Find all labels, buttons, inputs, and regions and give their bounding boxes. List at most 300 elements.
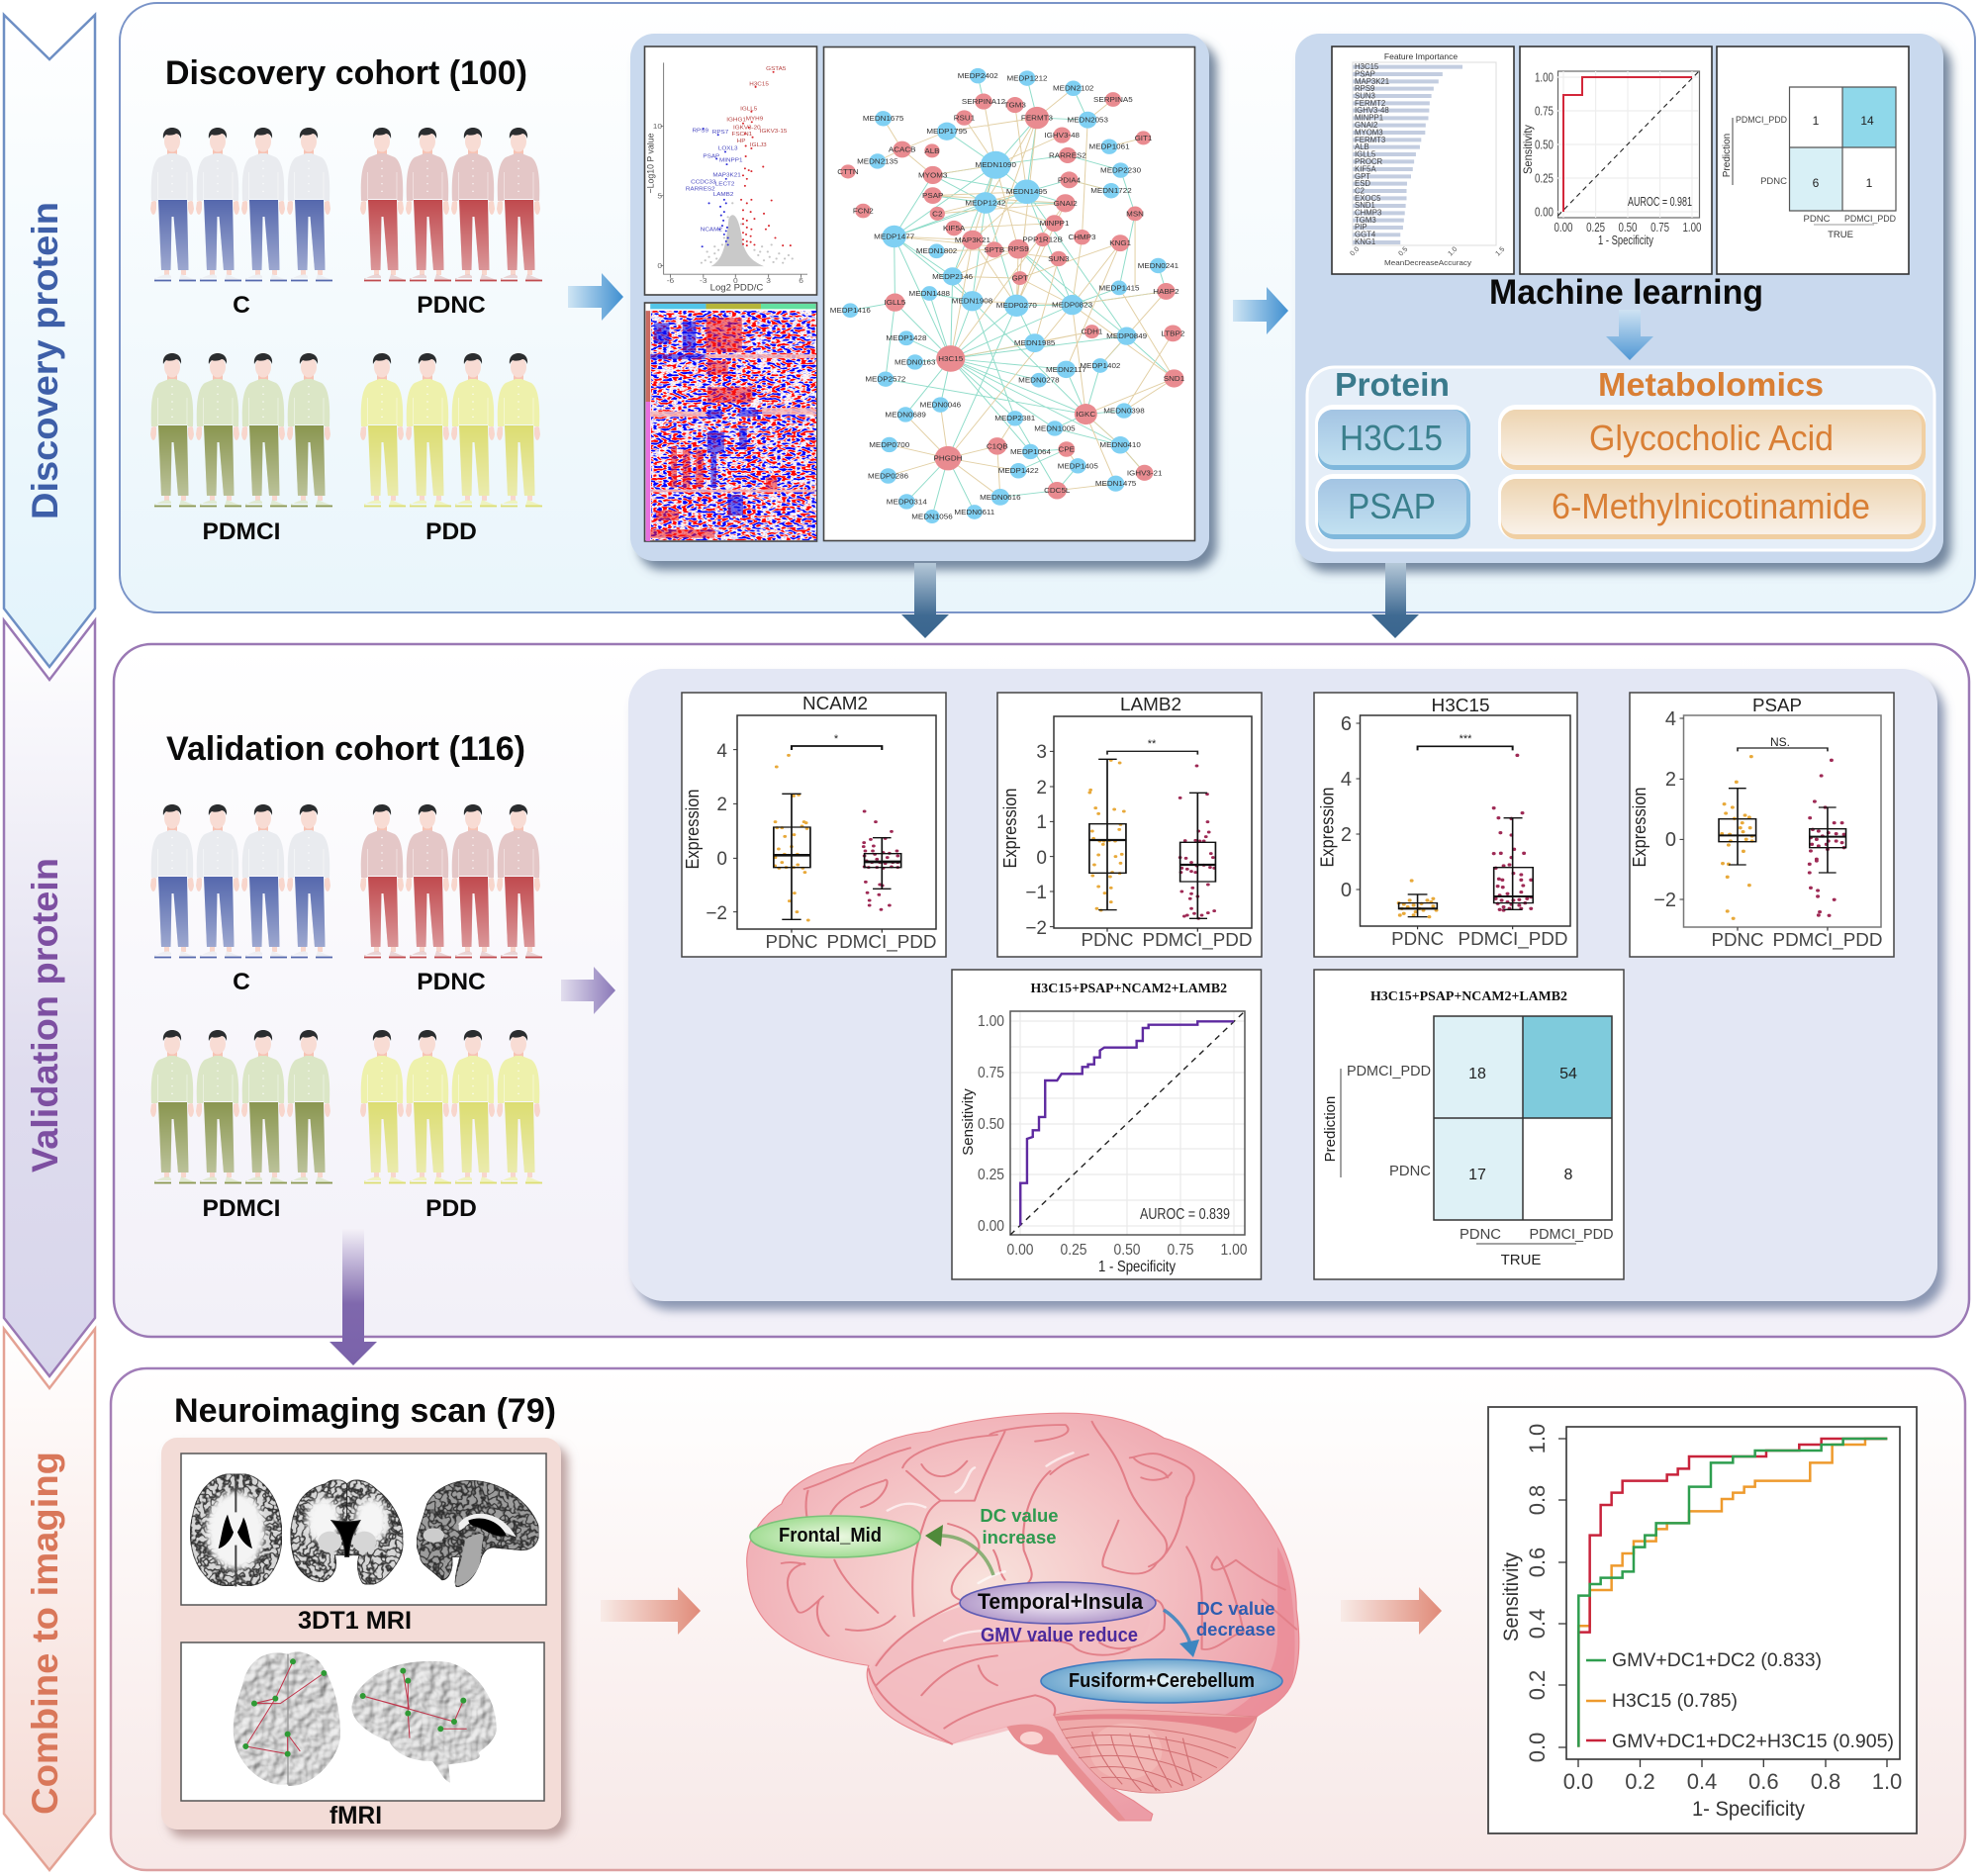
protein network: ALB <box>924 146 940 155</box>
chart: ROC discovery: Sensitivity <box>1521 125 1535 174</box>
chart: combined ROC: 0.2 <box>1525 1670 1550 1700</box>
chart: confusion matrix discovery: 14 <box>1860 114 1874 128</box>
heading: protein: Protein <box>1335 366 1450 403</box>
boxplot: LAMB2: LAMB2 <box>1120 695 1181 714</box>
heading: metabolomics: Metabolomics <box>1598 366 1824 403</box>
chip: glycocholic acid <box>1498 405 1926 470</box>
sidebar label: discovery protein: Discovery protein <box>25 202 65 519</box>
protein network: PSAP <box>922 191 943 200</box>
protein network: MEDN0689 <box>885 411 926 419</box>
chart: ROC validation: 1.00 <box>1221 1242 1248 1259</box>
protein network: MEDP2381 <box>994 415 1035 422</box>
panel: imaging <box>111 1368 1965 1870</box>
protein network: MEDN1475 <box>1095 479 1136 488</box>
chart: feature importance: RPS9 <box>1355 84 1374 93</box>
chart: combined ROC <box>1488 1407 1917 1833</box>
protein network: C2 <box>932 210 942 218</box>
arrow: DC increase <box>925 1525 993 1575</box>
protein network: KNG1 <box>1109 238 1131 247</box>
heading: validation cohort: Validation cohort (116) <box>166 730 525 768</box>
chip: H3C15 <box>1315 405 1470 470</box>
protein network: MEDP0823 <box>1052 301 1092 309</box>
volcano plot: Log2 PDD/C <box>710 283 764 293</box>
chart: ROC discovery: 1.00 <box>1682 221 1702 234</box>
sidebar: discovery protein chevron <box>4 15 95 667</box>
arrow: ML to biomarkers <box>1606 310 1653 360</box>
protein network: LTBP2 <box>1161 329 1184 337</box>
region: frontal mid: Frontal_Mid <box>779 1525 882 1547</box>
protein network: MEDN1005 <box>1034 424 1076 432</box>
boxplot: H3C15: H3C15 <box>1431 696 1490 715</box>
protein network: MYOM3 <box>918 171 947 179</box>
protein network: MEDN0398 <box>1103 407 1145 415</box>
chart: confusion matrix validation: PDMCI_PDD <box>1347 1063 1431 1079</box>
protein network: MEDP2230 <box>1100 166 1141 174</box>
chart: feature importance: PIP <box>1355 223 1367 232</box>
annotation: DC value increase <box>980 1505 1059 1548</box>
protein network: CDC5L <box>1044 486 1071 495</box>
volcano plot: GSTA5 <box>766 66 787 72</box>
protein network: CPE <box>1059 445 1075 453</box>
protein network: MEDN0163 <box>895 358 935 366</box>
chart: combined ROC: 1.0 <box>1525 1424 1550 1454</box>
chart: combined ROC: 0.0 <box>1525 1733 1550 1762</box>
volcano plot: MAP3K21 <box>712 173 741 178</box>
brain illustration <box>747 1413 1299 1821</box>
chart: confusion matrix discovery: 6 <box>1813 176 1820 190</box>
boxplot: H3C15: PDNC <box>1391 929 1444 949</box>
chart: ROC discovery: 0.75 <box>1535 105 1554 119</box>
protein network: MEDN1985 <box>1014 338 1055 347</box>
protein network: MEDN0611 <box>954 508 994 516</box>
chart: feature importance: 0.0 <box>1349 246 1361 257</box>
chart: ROC discovery: 0.75 <box>1650 221 1669 234</box>
protein network: MEDP1212 <box>1007 74 1048 82</box>
chart: feature importance: MINPP1 <box>1355 113 1383 123</box>
boxplot: PSAP: NS. <box>1770 735 1790 749</box>
protein network: PPP1R12B <box>1022 235 1063 244</box>
panel: omics <box>630 34 1209 561</box>
chart: feature importance: FERMT2 <box>1355 99 1385 108</box>
protein network: MEDP1405 <box>1058 462 1098 470</box>
chart: ROC discovery: 1.00 <box>1535 71 1554 85</box>
boxplot: PSAP: −2 <box>1653 890 1676 911</box>
chart: ROC validation: 0.25 <box>1061 1242 1087 1259</box>
sidebar: combine to imaging chevron <box>4 1329 95 1870</box>
chart: confusion matrix validation: 18 <box>1468 1066 1486 1082</box>
chart: confusion matrix validation: 54 <box>1559 1066 1577 1082</box>
arrow: scans to brain <box>601 1587 701 1635</box>
protein network: MEDP1416 <box>830 306 871 315</box>
protein network: FERMT3 <box>1021 114 1053 122</box>
boxplot: PSAP: PDMCI_PDD <box>1773 930 1882 951</box>
protein network: MEDP1402 <box>1080 361 1120 370</box>
fMRI images <box>181 1642 544 1801</box>
chart: feature importance: MYOM3 <box>1355 129 1383 137</box>
protein network: MEDP1428 <box>886 334 926 342</box>
volcano plot: RPS7 <box>712 130 729 136</box>
chart: confusion matrix discovery <box>1717 47 1909 274</box>
volcano plot: LECT2 <box>715 182 735 187</box>
sidebar: validation protein chevron <box>4 620 95 1376</box>
boxplot: H3C15: 6 <box>1341 713 1352 735</box>
volcano plot: PSAP <box>703 154 719 159</box>
arrow: omics to machine learning <box>1233 287 1288 334</box>
heading: machine learning: Machine learning <box>1489 273 1763 312</box>
icon: axial slice <box>190 1474 282 1586</box>
boxplot: LAMB2: PDMCI_PDD <box>1142 930 1253 951</box>
panel: scans <box>161 1438 561 1829</box>
volcano plot: CCDC33 <box>691 180 716 186</box>
chart: ROC discovery: 0.50 <box>1535 139 1554 152</box>
chart: ROC validation: 1.00 <box>978 1013 1004 1030</box>
icon: top view brain <box>234 1651 340 1786</box>
chart: combined ROC: 0.6 <box>1525 1548 1550 1577</box>
legend: H3C15 (0.785) <box>1612 1691 1738 1712</box>
region: temporal insula <box>960 1582 1156 1624</box>
region: fusiform cerebellum: Fusiform+Cerebellum <box>1069 1670 1255 1692</box>
boxplot: NCAM2: PDMCI_PDD <box>827 932 936 953</box>
chart: ROC validation: AUROC = 0.839 <box>1140 1206 1230 1223</box>
chart: feature importance: MeanDecreaseAccuracy <box>1384 258 1471 267</box>
protein network: RSU1 <box>954 114 975 122</box>
protein network: MEDN0616 <box>980 493 1021 502</box>
boxplot: NCAM2: NCAM2 <box>802 694 868 713</box>
protein network: MEDP1061 <box>1089 142 1130 151</box>
protein network: MEDN2102 <box>1053 84 1093 93</box>
chart: feature importance: ESD <box>1355 179 1370 188</box>
volcano plot: RARRES2 <box>686 187 715 193</box>
chip: PSAP: PSAP <box>1348 486 1436 526</box>
chart: feature importance: KIF5A <box>1355 164 1376 174</box>
chart: combined ROC: 1.0 <box>1872 1769 1902 1794</box>
chart: confusion matrix discovery: Prediction <box>1722 134 1733 177</box>
protein network <box>823 47 1195 540</box>
protein network: MEDN1488 <box>909 289 950 298</box>
chart: feature importance: 1.0 <box>1447 246 1459 257</box>
chart: ROC discovery: 0.50 <box>1619 221 1638 234</box>
legend <box>1586 1650 1894 1752</box>
chart: feature importance: CHMP3 <box>1355 208 1381 218</box>
protein network: MEDN2135 <box>857 157 898 165</box>
boxplot: H3C15: 2 <box>1341 824 1352 846</box>
group labels validation <box>203 969 486 1222</box>
region: temporal insula: Temporal+Insula <box>978 1589 1144 1614</box>
boxplot: LAMB2: Expression <box>1000 788 1020 869</box>
boxplot: LAMB2: −2 <box>1025 918 1047 939</box>
protein network: MEDN1090 <box>976 161 1016 169</box>
volcano plot: FSCN1 <box>731 132 753 138</box>
chart: ROC discovery <box>1520 47 1712 274</box>
volcano plot: HP <box>737 139 745 144</box>
group labels validation: PDD <box>425 1195 477 1222</box>
arrow: brain to ROC <box>1341 1587 1442 1635</box>
arrow: omics to validation <box>901 563 949 638</box>
chip: PSAP <box>1315 474 1470 539</box>
chart: combined ROC: 0.8 <box>1811 1769 1840 1794</box>
boxplot: PSAP: Expression <box>1630 788 1649 867</box>
volcano plot: IGLL5 <box>740 107 758 112</box>
chart: confusion matrix validation: 17 <box>1468 1167 1486 1183</box>
chart: confusion matrix validation: TRUE <box>1501 1252 1541 1268</box>
region: frontal mid <box>750 1516 920 1557</box>
chart: ROC discovery: AUROC = 0.981 <box>1628 195 1692 209</box>
protein network: MINPP1 <box>1040 219 1069 228</box>
protein network: IGLL5 <box>885 298 905 307</box>
protein network: SPTB <box>984 245 1004 254</box>
volcano plot: -6 <box>667 276 675 285</box>
group PDMCI validation <box>150 1030 332 1183</box>
arrow: DC decrease <box>1164 1610 1199 1657</box>
chart: feature importance: Feature Importance <box>1384 51 1458 61</box>
legend: GMV+DC1+DC2+H3C15 (0.905) <box>1612 1732 1894 1752</box>
group C validation <box>150 804 332 958</box>
chart: ROC validation: H3C15+PSAP+NCAM2+LAMB2 <box>1031 982 1227 996</box>
protein network: MEDN1722 <box>1090 186 1132 195</box>
chart: feature importance: GPT <box>1355 172 1370 181</box>
chart: ROC validation: 0.50 <box>1114 1242 1141 1259</box>
protein network: MEDP2402 <box>958 71 998 80</box>
boxplot: NCAM2: 2 <box>716 795 727 815</box>
protein network: SERPINA5 <box>1093 95 1133 104</box>
arrow: validation to imaging <box>330 1229 377 1365</box>
chart: feature importance: 1.5 <box>1494 246 1506 257</box>
chart: feature importance: ALB <box>1355 142 1369 151</box>
protein network: MEDN0410 <box>1099 441 1141 449</box>
chart: feature importance: FERMT3 <box>1355 136 1385 144</box>
boxplot: NCAM2: PDNC <box>766 932 817 952</box>
chart: confusion matrix discovery: PDMCI_PDD <box>1736 115 1787 126</box>
protein network: ACACB <box>889 145 916 153</box>
protein network: MEDP1064 <box>1010 447 1052 456</box>
volcano plot: LAMB2 <box>713 192 734 198</box>
chip: 6-methylnicotinamide: 6-Methylnicotinamide <box>1552 486 1870 526</box>
boxplot: PSAP: 4 <box>1665 708 1676 730</box>
protein network: MEDP1477 <box>874 233 914 240</box>
protein network: CHMP3 <box>1068 233 1096 241</box>
boxplot: NCAM2: −2 <box>706 903 727 924</box>
protein network: MEDP0849 <box>1106 331 1147 340</box>
protein network: MEDN2053 <box>1068 116 1108 125</box>
chart: combined ROC: 0.0 <box>1563 1769 1593 1794</box>
volcano plot: RPS9 <box>693 129 709 134</box>
protein network: MEDP1795 <box>926 128 967 136</box>
boxplot: PSAP: 2 <box>1665 769 1676 791</box>
chart: ROC discovery: 0.00 <box>1535 206 1554 220</box>
heading: discovery cohort: Discovery cohort (100) <box>165 54 527 92</box>
volcano plot: H3C15 <box>749 82 770 87</box>
boxplot: LAMB2: 3 <box>1036 742 1047 763</box>
annotation: DC value increase: increase <box>982 1527 1057 1548</box>
group labels validation: C <box>233 969 250 995</box>
boxplot: LAMB2: −1 <box>1025 883 1047 903</box>
protein network: H3C15 <box>938 354 963 363</box>
panel: discovery <box>120 3 1975 612</box>
chart: feature importance: KNG1 <box>1355 237 1375 246</box>
chart: feature importance: C2 <box>1355 186 1365 196</box>
chart: ROC validation: Sensitivity <box>960 1088 977 1156</box>
arrow: ML to validation <box>1371 563 1419 638</box>
protein network: MEDN1802 <box>916 247 957 255</box>
protein network: MEDP1242 <box>965 199 1005 207</box>
chart: confusion matrix discovery: 1 <box>1866 176 1873 190</box>
group labels discovery: PDMCI <box>203 518 280 545</box>
boxplot: NCAM2: Expression <box>683 790 703 869</box>
volcano plot: IGKV3-15 <box>760 129 788 135</box>
panel: biomarkers <box>1307 366 1934 550</box>
annotation: DC value decrease: decrease <box>1196 1619 1275 1640</box>
chart: confusion matrix validation: 8 <box>1564 1167 1573 1183</box>
boxplot: NCAM2: * <box>834 733 839 745</box>
boxplot: LAMB2 <box>997 693 1262 957</box>
chart: feature importance: GGT4 <box>1355 230 1376 239</box>
volcano plot: NCAM2 <box>701 228 723 233</box>
volcano plot: LOXL3 <box>718 146 738 152</box>
chart: feature importance: H3C15 <box>1355 62 1379 71</box>
group labels validation: PDNC <box>417 969 486 995</box>
chart: feature importance: SND1 <box>1355 201 1375 210</box>
boxplot: LAMB2: 0 <box>1036 848 1047 869</box>
group C discovery <box>150 128 332 281</box>
chip: H3C15: H3C15 <box>1340 418 1443 458</box>
boxplot: H3C15: PDMCI_PDD <box>1459 929 1567 950</box>
group labels discovery: PDNC <box>417 292 486 319</box>
protein network: MEDP0314 <box>887 498 928 506</box>
chart: confusion matrix discovery: PDNC <box>1804 214 1831 225</box>
chart: ROC validation: 0.75 <box>1168 1242 1194 1259</box>
boxplot: H3C15: Expression <box>1318 788 1338 867</box>
boxplot: NCAM2 <box>682 693 946 957</box>
panel: machine learning <box>1295 34 1943 563</box>
group labels discovery: PDD <box>425 518 477 545</box>
group PDMCI discovery <box>150 353 332 507</box>
protein network: PDIA4 <box>1058 176 1082 184</box>
panel: validation results <box>628 669 1937 1301</box>
boxplot: H3C15: 0 <box>1341 880 1352 901</box>
protein network: KIF5A <box>943 224 966 233</box>
protein network: MEDN2117 <box>1046 365 1086 374</box>
boxplot: PSAP <box>1630 693 1894 957</box>
volcano plot: −Log10 P value <box>645 134 655 193</box>
chart: confusion matrix validation: H3C15+PSAP+NCAM2+LAMB2 <box>1370 989 1567 1004</box>
panel: validation <box>114 644 1969 1337</box>
chart: combined ROC: 0.6 <box>1748 1769 1779 1794</box>
chart: feature importance: 0.5 <box>1397 246 1409 257</box>
protein network: IGHV3-48 <box>1044 131 1080 140</box>
chart: combined ROC: 0.2 <box>1625 1769 1655 1794</box>
annotation: DC value decrease <box>1196 1598 1275 1640</box>
legend: GMV+DC1+DC2 (0.833) <box>1612 1650 1822 1671</box>
protein network: MEDN0046 <box>920 401 961 409</box>
volcano plot <box>645 47 817 295</box>
chart: feature importance: IGHV3-48 <box>1355 106 1389 115</box>
volcano plot: MINPP1 <box>719 158 743 164</box>
chart: confusion matrix validation: PDNC <box>1460 1226 1501 1243</box>
boxplot: H3C15 <box>1314 693 1577 957</box>
protein network: GIT1 <box>1135 134 1152 142</box>
protein network: MEDP2146 <box>932 272 973 281</box>
volcano plot: 0 <box>657 261 663 270</box>
group PDD validation <box>360 1030 542 1183</box>
protein network: MEDP0286 <box>868 472 908 480</box>
sidebar label: validation protein: Validation protein <box>25 858 65 1172</box>
chart: feature importance: EXOC5 <box>1355 194 1381 203</box>
region: fusiform cerebellum <box>1041 1659 1282 1703</box>
chart: ROC validation <box>952 970 1261 1279</box>
protein network: MAP3K21 <box>955 235 990 244</box>
chart: ROC validation: 0.00 <box>978 1218 1004 1235</box>
volcano plot: 3 <box>766 276 771 285</box>
chart: feature importance: MAP3K21 <box>1355 77 1389 86</box>
group labels discovery <box>203 292 486 545</box>
chart: feature importance: SUN3 <box>1355 91 1375 101</box>
arrow: cohort to validation plots <box>561 967 615 1014</box>
group PDNC discovery <box>360 128 542 281</box>
icon: lateral brain <box>351 1661 497 1783</box>
protein network: RARRES2 <box>1049 151 1086 159</box>
protein network: MEDP1422 <box>998 467 1039 475</box>
chart: combined ROC: 0.8 <box>1525 1485 1550 1515</box>
heatmap <box>645 303 817 541</box>
volcano plot: -3 <box>700 276 707 285</box>
protein network: RPS9 <box>1008 244 1029 253</box>
chart: ROC discovery: 0.25 <box>1535 172 1554 186</box>
protein network: MEDN1908 <box>952 297 992 306</box>
protein network: PHGDH <box>934 454 962 462</box>
protein network: MSN <box>1126 210 1144 218</box>
chart: confusion matrix discovery: 1 <box>1813 114 1820 128</box>
chart: confusion matrix discovery: PDMCI_PDD <box>1844 214 1896 225</box>
volcano plot: MYH9 <box>746 117 764 122</box>
chart: ROC validation: 0.25 <box>978 1167 1004 1183</box>
icon: coronal slice <box>291 1480 403 1585</box>
chart: confusion matrix validation: Prediction <box>1322 1096 1339 1162</box>
arrow: cohort to omics <box>568 273 623 321</box>
boxplot: NCAM2: 4 <box>716 741 727 762</box>
protein network: GNAI2 <box>1054 199 1078 208</box>
boxplot: LAMB2: 1 <box>1036 812 1047 833</box>
chart: ROC validation: 0.00 <box>1007 1242 1034 1259</box>
chart: combined ROC: 0.4 <box>1687 1769 1717 1794</box>
protein network: MEDP0700 <box>869 440 909 449</box>
chart: ROC validation: 0.75 <box>978 1065 1004 1081</box>
volcano plot: 10 <box>653 122 663 131</box>
chip: glycocholic acid: Glycocholic Acid <box>1589 418 1834 458</box>
protein network: CDH1 <box>1082 328 1102 335</box>
annotation: DC value decrease: DC value <box>1196 1598 1275 1619</box>
protein network: MEDP0270 <box>996 302 1037 310</box>
chart: confusion matrix validation <box>1314 970 1624 1279</box>
protein network: MEDN1495 <box>1006 188 1047 196</box>
chart: confusion matrix discovery: TRUE <box>1828 230 1853 240</box>
group PDD discovery <box>360 353 542 507</box>
chart: ROC discovery: 0.00 <box>1554 221 1573 234</box>
chart: feature importance: IGLL5 <box>1355 150 1376 158</box>
label: fMRI: fMRI <box>330 1802 382 1829</box>
chart: ROC validation: 0.50 <box>978 1116 1004 1133</box>
protein network: SUN3 <box>1048 254 1069 263</box>
group labels validation: PDMCI <box>203 1195 280 1222</box>
boxplot: PSAP: 0 <box>1665 829 1676 851</box>
icon: sagittal slice <box>417 1480 538 1587</box>
protein network: MEDN1056 <box>911 513 953 520</box>
protein network: C1QB <box>987 442 1008 450</box>
volcano plot: IGHG1 <box>726 118 747 123</box>
boxplot: H3C15: 4 <box>1341 769 1352 791</box>
boxplot: LAMB2: ** <box>1148 738 1157 750</box>
chart: combined ROC: 0.4 <box>1525 1609 1550 1639</box>
volcano plot: 6 <box>799 276 803 285</box>
